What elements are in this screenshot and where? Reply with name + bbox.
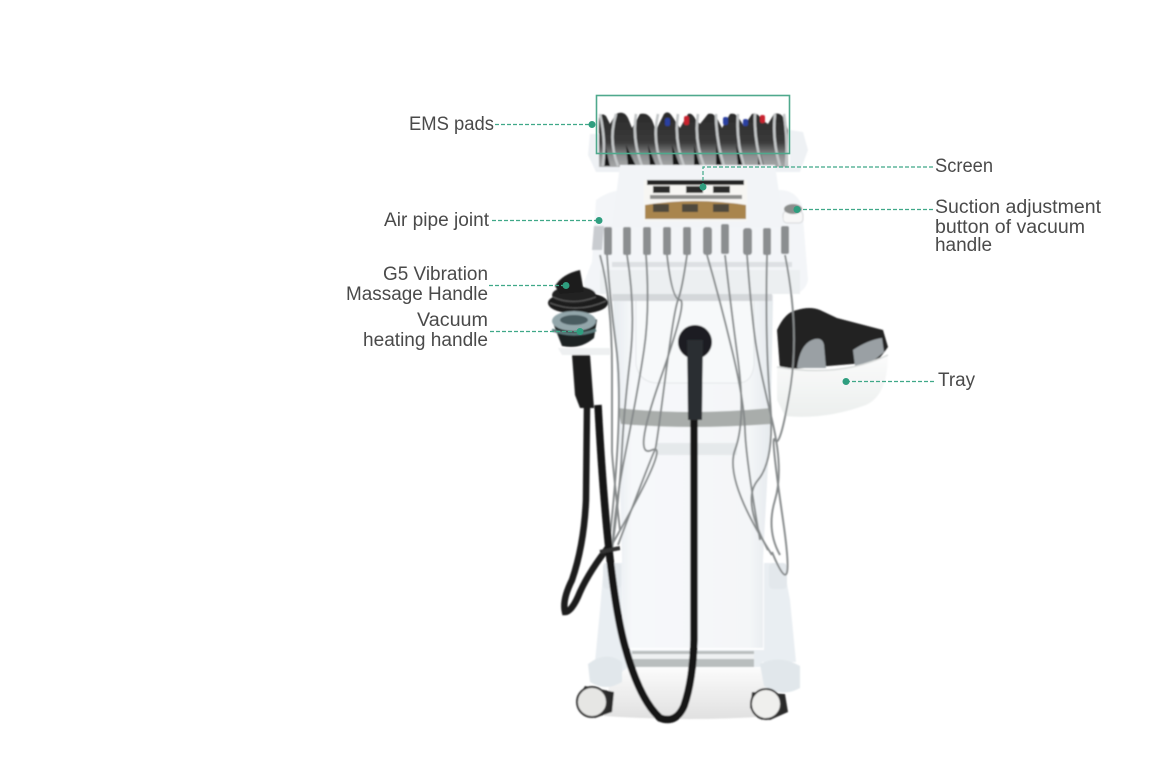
label: G5 Vibration Massage Handle — [346, 264, 570, 305]
label: Suction adjustment button: handle — [935, 235, 992, 256]
label: Suction adjustment button — [794, 197, 1102, 256]
G5 vibration massage handle — [548, 270, 608, 314]
screen housing — [612, 165, 784, 227]
vacuum heating handle — [552, 311, 597, 347]
right caster wheel — [750, 689, 788, 720]
control screen — [644, 180, 747, 221]
label: Suction adjustment button: Suction adjustment — [935, 197, 1102, 218]
label: Air pipe joint: Air pipe joint — [384, 210, 490, 231]
label: Vacuum heating handle — [363, 310, 584, 351]
label: Suction adjustment button: button of vacuum — [935, 217, 1085, 238]
floor shadow — [604, 668, 772, 719]
EMS cable connectors — [604, 224, 789, 255]
grey band — [618, 408, 771, 427]
label: EMS pads — [409, 114, 596, 135]
EMS pad tray — [588, 112, 808, 172]
vacuum handle grip — [572, 355, 594, 408]
label: EMS pads: EMS pads — [409, 114, 494, 135]
EMS pads — [599, 112, 788, 167]
label: Tray — [842, 370, 975, 391]
column inset panel — [636, 296, 754, 383]
corrugated hose — [564, 405, 610, 612]
main column — [613, 295, 773, 648]
label: Screen: Screen — [935, 156, 993, 177]
label: Air pipe joint — [384, 210, 602, 231]
label: Tray: Tray — [938, 370, 975, 391]
left caster wheel — [576, 686, 614, 718]
machine photo illustration — [548, 112, 888, 720]
EMS grey cables — [600, 255, 794, 575]
centre hose loop — [598, 405, 694, 720]
base frame and legs — [588, 563, 800, 693]
suction adjustment button — [783, 204, 803, 223]
handle shelf — [558, 348, 610, 355]
console and lower lip — [584, 190, 808, 301]
label: Vacuum heating handle: Vacuum — [417, 310, 488, 331]
label: Screen — [700, 156, 993, 190]
lower faint band — [657, 443, 737, 455]
hose clip — [600, 548, 620, 552]
EMS pads highlight box — [596, 96, 790, 154]
label: Vacuum heating handle: heating handle — [363, 330, 488, 351]
label: G5 Vibration Massage Handle: G5 Vibration — [383, 264, 488, 285]
vacuum tray bowl — [777, 308, 888, 417]
centre hose nozzle — [678, 325, 712, 420]
label: G5 Vibration Massage Handle: Massage Handle — [346, 284, 488, 305]
